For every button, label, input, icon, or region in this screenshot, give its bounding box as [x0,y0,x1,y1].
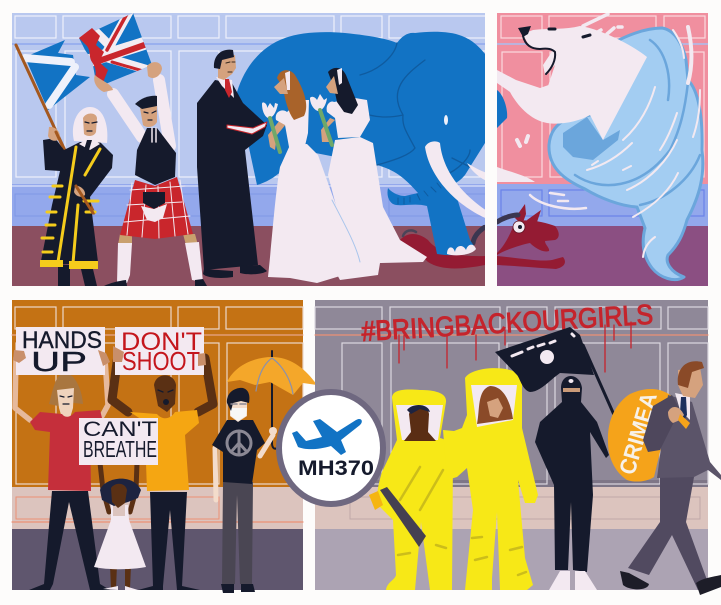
hazmat window [396,405,443,440]
bride with red hair [262,70,360,283]
child with raised arms [94,463,146,590]
union jack flag [79,13,152,84]
flag pole [583,345,615,417]
wall marks [517,136,528,146]
child dress [94,505,146,569]
suit arm over sack [643,395,680,452]
donkey ears [515,204,541,226]
bear splashes [583,14,622,34]
suit hair [678,361,704,388]
second bride bouquet [310,94,327,111]
magnifying glass with MH370 [279,392,383,504]
bride headband [285,71,290,90]
orange sack labelled Crimea [608,389,690,482]
judge pole overlay [56,132,93,213]
umbrella holder shirt [212,420,265,484]
sign: can't breathe: CAN'T [83,418,157,441]
priest [197,50,267,278]
judge cuffs [40,260,98,269]
second bride face [326,76,338,94]
hazmat face [404,406,436,441]
hazmat body two [443,368,538,590]
elephant trunk wrinkles [398,183,441,204]
red donkey on floor [497,193,586,269]
panel: bottom left, protesters [12,300,317,593]
kilt man vest [135,128,176,185]
magnifier handle [380,487,426,547]
kilt man shoes [104,279,207,286]
judge hands [48,127,85,197]
bride with black hair [310,68,427,280]
protester shirt [30,410,102,491]
donkey neck and head [497,220,559,255]
plane icon [292,419,362,455]
umbrella canopy [227,357,317,395]
child feet [103,586,138,590]
militant forehead dot [568,379,574,383]
kilt man socks [117,242,203,283]
suit hand [668,407,684,423]
sack strap [678,414,690,429]
elephant leg and tusk overlap [497,90,507,128]
orange sack labelled Crimea: CRIMEA [614,389,662,477]
suit head [678,367,703,398]
umbrella holder face [230,400,247,422]
sign: can't breathe: BREATHE [83,436,157,462]
swirl white streaks [587,30,700,257]
judge wig [73,107,107,143]
kilt [120,177,193,239]
priest shoes [203,265,267,278]
protester trousers [29,491,110,590]
person in yellow hazmat suit, second [443,368,538,590]
elephant [237,32,490,255]
blue swirl of polar bear water [549,27,703,280]
judge collar and tie [79,142,100,150]
scottish flag on pole [16,40,94,213]
kilt man arms [113,80,170,146]
bride bodice [276,100,309,147]
bear eyes [549,29,590,37]
umbrella pole [272,351,282,449]
elephant body [237,32,490,255]
flag seal [540,350,554,364]
second bride bodice [327,98,370,138]
sporran [143,192,165,209]
militant body [535,376,609,572]
protester in red shirt [15,358,110,590]
bride dress [268,144,360,283]
judge face [83,114,97,136]
umbrella holder shoes [221,584,255,593]
umbrella holder arms [215,435,273,500]
child hair [100,479,141,506]
donkey mane [473,227,485,243]
second bride arm [321,118,335,142]
suit jacket [657,395,721,480]
sign: hands up [16,327,105,377]
sign: don't shoot [115,327,204,376]
kilt man head [140,106,157,127]
priest robe [197,80,267,270]
masked militant with flag [495,327,615,590]
suit trousers [628,477,707,590]
glove on handle [369,491,383,510]
priest hair [214,50,234,69]
elephant tusks [425,141,490,220]
MH370 label: MH370 [298,457,374,480]
panel: top left, politics and weddings [12,10,490,286]
protester with umbrella [212,351,317,593]
hazmat hair [477,386,513,424]
bride bouquet [262,102,278,118]
polar bear [497,14,647,140]
peace symbol [227,431,251,455]
bear nose [518,26,531,37]
swirl outer shape [549,28,703,280]
donkey tail [403,230,416,236]
sign: can't breathe [79,418,158,465]
second bride headband [337,68,342,85]
hashtag: bring back our girls: #BRINGBACKOURGIRLS [361,299,654,347]
suit shoes [620,571,721,595]
bride face [274,78,288,94]
protester yellow shirt [130,410,199,491]
man in suit carrying sack [620,361,721,595]
umbrella holder hair [227,388,249,411]
bride hair [277,70,306,120]
hazmat folds [398,467,446,555]
red donkey body under elephant [400,234,485,268]
protester in yellow shirt [112,355,213,590]
open book [227,122,267,134]
sign: don't shoot: DON'T [121,328,202,356]
judge robe [40,138,113,266]
swirl dark folds [575,40,700,205]
donkey mane [497,215,518,222]
umbrella holder hand [269,427,277,435]
magnifier lens [279,392,383,504]
child arms [100,463,137,512]
priest tie [225,79,232,98]
elephant eye [444,115,448,125]
panel: bottom right, global headlines [279,299,721,595]
man in kilt [94,62,207,286]
flying white streaks [530,193,586,209]
protester trousers [138,492,200,590]
sign: hands up: HANDS [22,327,102,354]
flag script marks [512,334,574,356]
second bride hair [328,68,358,114]
elephant toes [447,245,476,255]
black flag [495,327,594,392]
sign: don't shoot: SHOOT [122,346,200,376]
hazmat face two [487,398,503,418]
second bride dress [328,137,427,280]
protester arms [15,358,108,420]
militant sneakers [549,571,597,590]
kilt man knees [118,234,198,245]
protester head [154,375,176,412]
priest collar [216,77,234,98]
militant eyes [563,388,580,392]
priest head [218,55,236,80]
paint drips [399,322,631,372]
kilt man hands [94,62,162,92]
kilt man cap [135,96,157,109]
bear mouth line [523,36,555,74]
glasses [231,403,246,405]
protester hair [49,373,83,406]
bride arm [268,120,287,150]
elephant wrinkles [360,43,472,175]
protester dark arms [112,355,213,412]
donkey eye [513,221,525,233]
swirl dark interior [563,117,620,160]
surgical mask [230,408,247,421]
protester hands on signs [13,346,206,366]
panel: top right, polar bear and donkey [497,13,708,286]
protester face [57,388,74,418]
child face [111,484,127,508]
person in yellow hazmat suit [377,389,453,590]
suit shirt and tie [675,393,690,420]
judge yellow trim [42,147,100,263]
judge legs [58,265,97,286]
sign: hands up: UP [31,346,87,377]
child legs [110,565,131,589]
donkey leg [497,256,565,269]
umbrella holder trousers [222,482,253,584]
judge [40,107,113,286]
hazmat folds two [472,537,526,575]
hazmat window two [471,385,517,427]
hazmat body [377,389,453,590]
hashtag: bring back our girls [361,299,654,372]
